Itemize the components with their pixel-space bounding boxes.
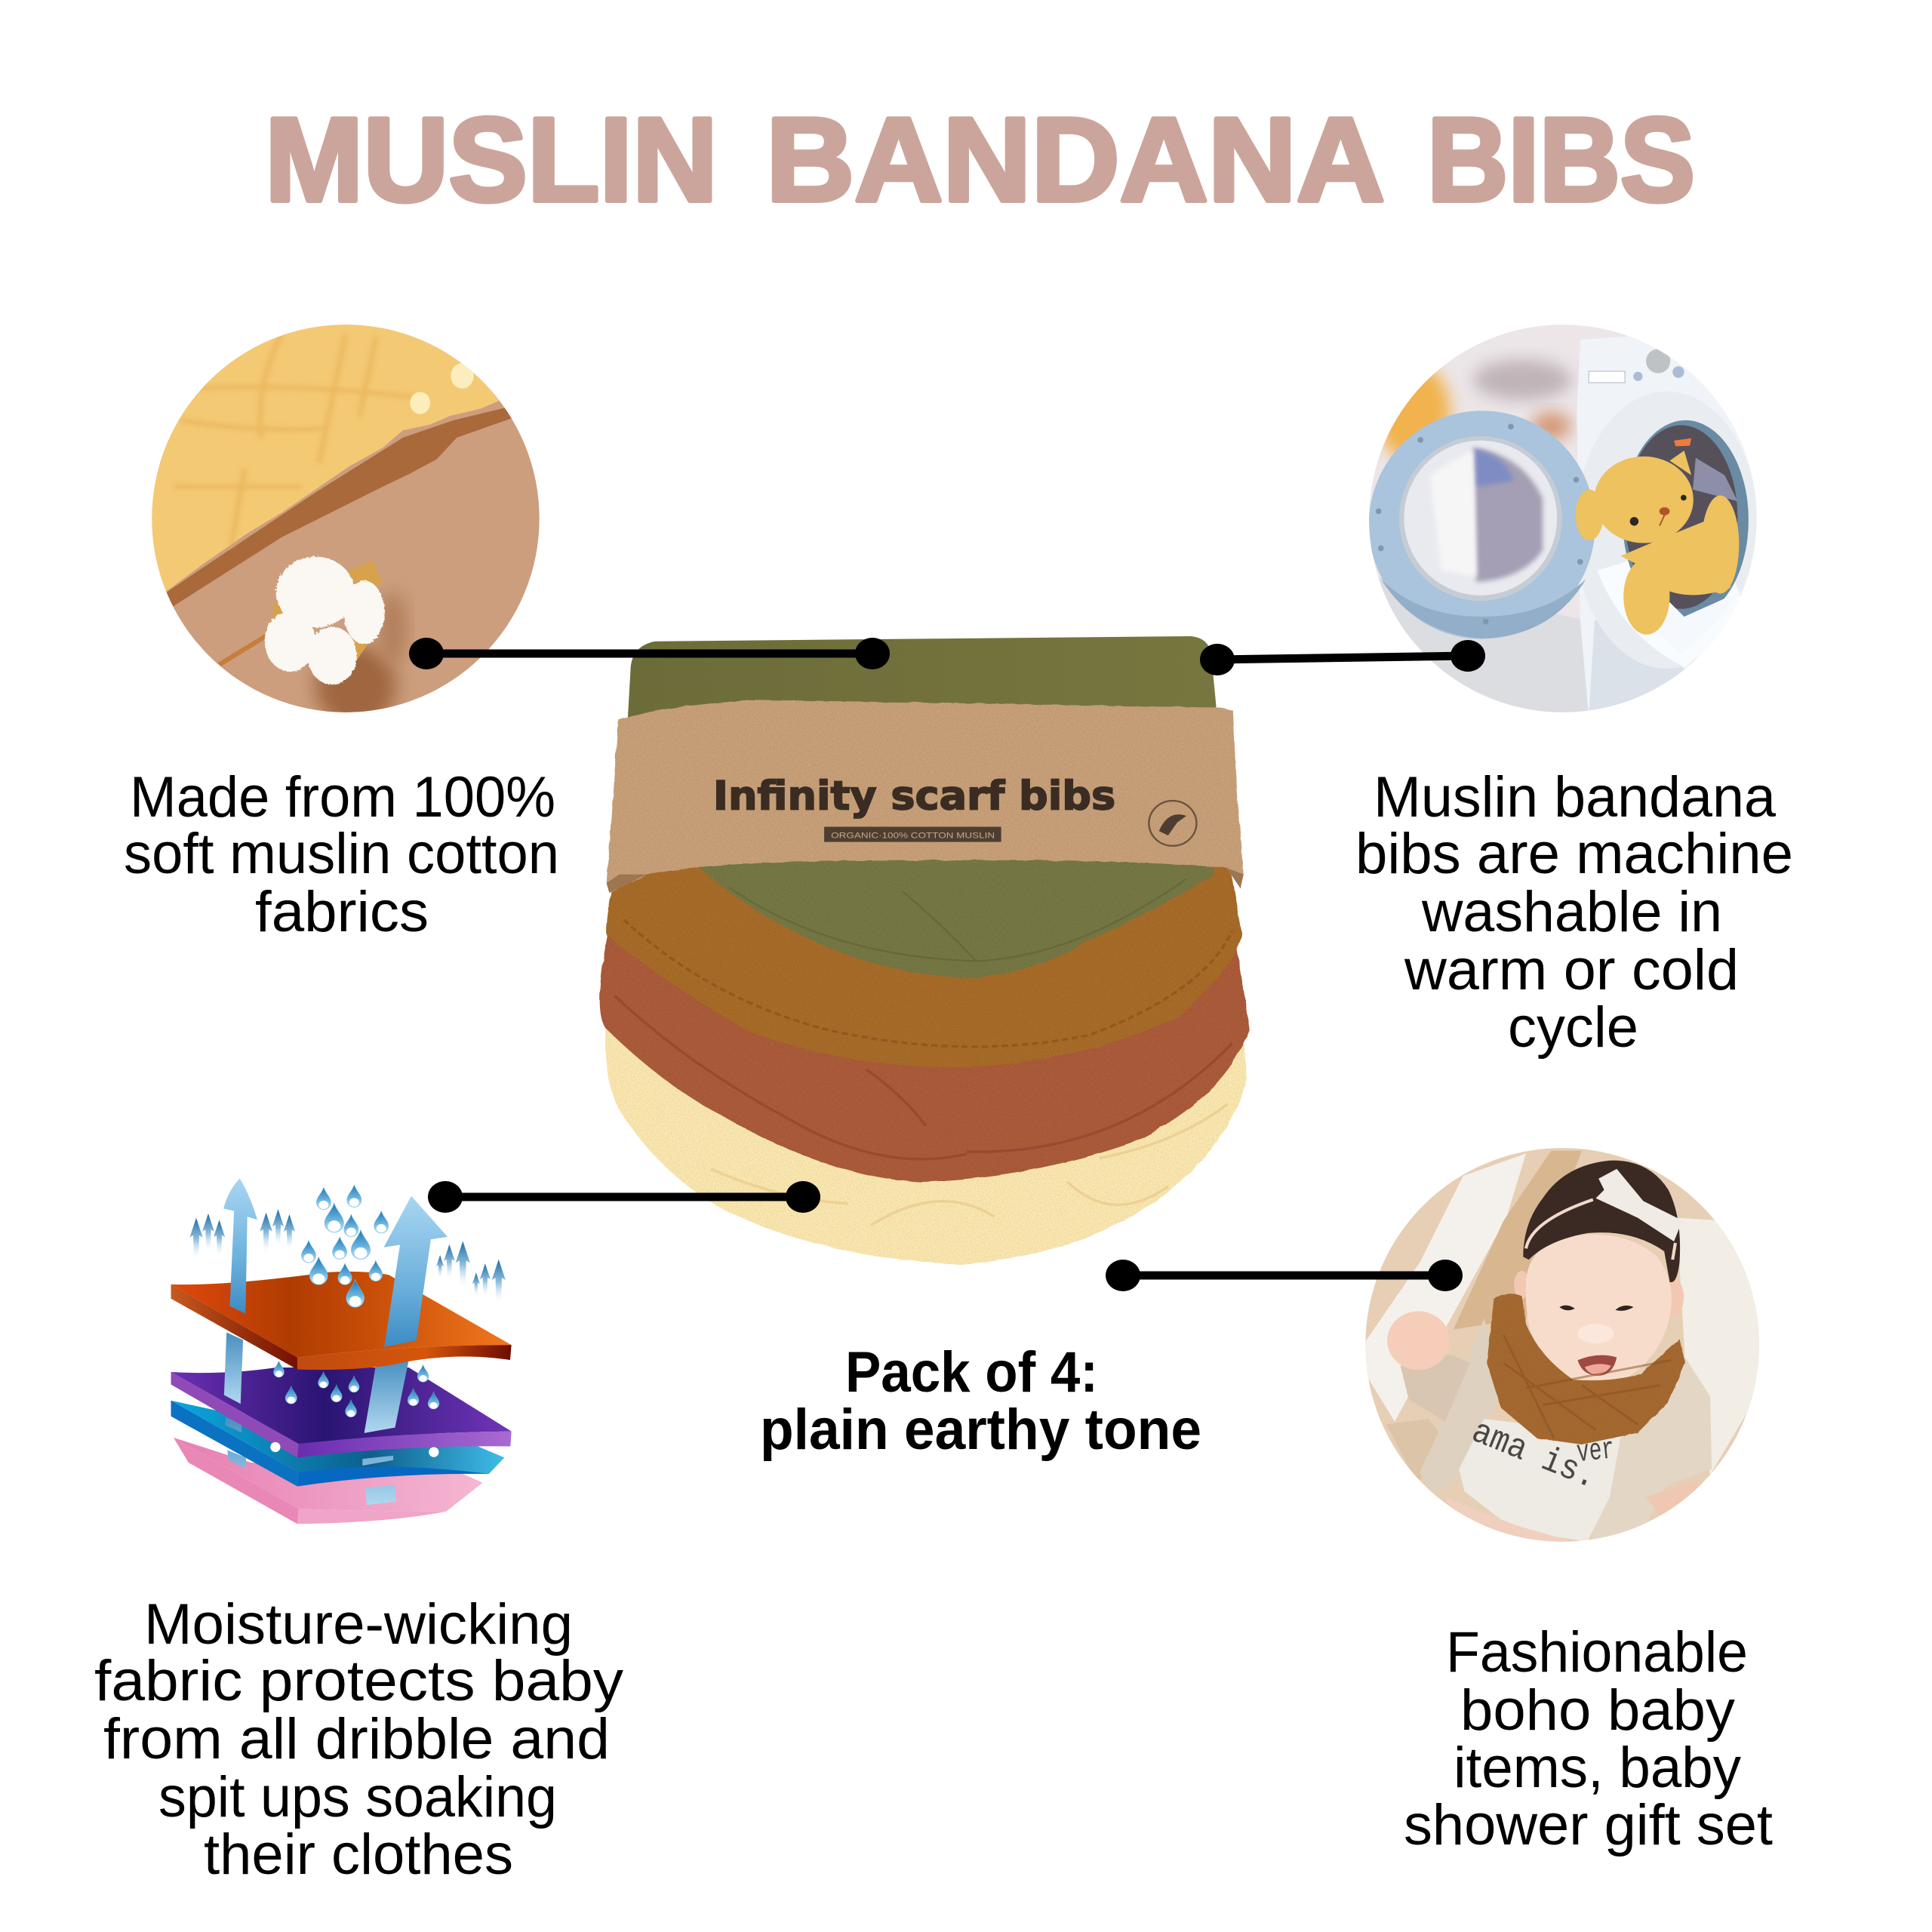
- text block: fashion: items, baby: [1454, 1736, 1741, 1800]
- hair: [1523, 1161, 1680, 1282]
- baby right hand: [1646, 1481, 1700, 1515]
- blue layer: [171, 1401, 504, 1474]
- text block: moisture: from all dribble and: [103, 1707, 610, 1771]
- text block: pack of 4: Pack of 4:: [845, 1340, 1098, 1404]
- text block: washing: bibs are machine: [1355, 822, 1793, 886]
- onesie: [1459, 1419, 1621, 1542]
- text block: moisture: [94, 1592, 623, 1887]
- olive bib top: [628, 636, 1216, 749]
- washing machine body: [1577, 336, 1765, 718]
- text block: moisture: fabric protects baby: [94, 1649, 623, 1713]
- text block: fashion: Fashionable: [1446, 1620, 1748, 1684]
- photo circle: teddy bear in washing machine: [1361, 319, 1765, 724]
- title: [265, 94, 1695, 226]
- text block: moisture: their clothes: [204, 1823, 513, 1887]
- text block: moisture: spit ups soaking: [158, 1765, 557, 1829]
- teddy bear: [1576, 451, 1739, 635]
- cardigan: [1401, 1318, 1712, 1544]
- text block: washing: warm or cold: [1404, 938, 1739, 1002]
- onesie print: [1473, 1424, 1612, 1485]
- moisture-wicking fabric layers illustration: [171, 1179, 512, 1524]
- baby fist: [1387, 1312, 1450, 1370]
- text block: moisture: Moisture-wicking: [144, 1592, 573, 1657]
- caramel bib: [607, 853, 1242, 1067]
- cream bib: [605, 1009, 1247, 1264]
- water drops: [270, 1185, 439, 1457]
- terracotta bib: [600, 922, 1250, 1182]
- text block: pack of 4: plain earthy tone: [760, 1398, 1201, 1462]
- onesie print: ama is.: [1466, 1411, 1603, 1498]
- product: stack of four muslin bibs with kraft band: [600, 636, 1250, 1264]
- yellow muslin fabric: [152, 325, 500, 592]
- title: BANDANA: [766, 94, 1385, 226]
- cushions: [1364, 1153, 1526, 1422]
- headband and bow: [1526, 1169, 1682, 1260]
- text block: pack of 4: [760, 1340, 1201, 1462]
- pink layer: [174, 1438, 483, 1512]
- text block: washing: cycle: [1508, 995, 1638, 1060]
- door ring: [1369, 411, 1595, 639]
- text block: fabric: [124, 765, 559, 944]
- title: MUSLIN: [265, 94, 718, 226]
- small vapor arrows: [189, 1209, 506, 1304]
- purple layer: [171, 1367, 512, 1444]
- olive bib lower: [691, 853, 1214, 978]
- band label: ORGANIC·100% COTTON MUSLIN: [831, 830, 995, 840]
- band label: [713, 773, 1196, 846]
- muslin bib: [1487, 1294, 1685, 1444]
- callout line: washing: [1200, 640, 1485, 675]
- callout line: fabric: [409, 638, 890, 669]
- text block: fashion: shower gift set: [1404, 1793, 1773, 1857]
- title: BIBS: [1427, 94, 1695, 226]
- band label: Infinity scarf bibs: [713, 773, 1115, 819]
- onesie print: ver: [1575, 1432, 1616, 1471]
- kraft paper band: [607, 700, 1244, 893]
- baby face: [1514, 1235, 1684, 1380]
- text block: washing: Muslin bandana: [1374, 765, 1777, 829]
- callout line: baby: [1106, 1260, 1463, 1291]
- text block: fabric: soft muslin cotton: [124, 822, 559, 886]
- middle arrow shafts: [224, 1333, 243, 1404]
- large arrows: [223, 1179, 257, 1314]
- photo circle: smiling baby wearing bib: [1364, 1145, 1763, 1544]
- text block: fashion: [1404, 1620, 1773, 1857]
- callout line: moisture: [428, 1181, 820, 1213]
- photo circle: muslin fabric and cotton: [152, 325, 540, 712]
- lower arrow stubs: [225, 1417, 396, 1505]
- cotton boll: [217, 634, 266, 666]
- text block: washing: washable in: [1421, 880, 1722, 944]
- text block: fabric: fabrics: [255, 880, 429, 944]
- text block: fabric: Made from 100%: [130, 765, 555, 829]
- text block: washing: [1355, 765, 1793, 1060]
- orange layer: [171, 1272, 512, 1358]
- text block: fashion: boho baby: [1460, 1678, 1735, 1743]
- snap buttons: [451, 363, 474, 389]
